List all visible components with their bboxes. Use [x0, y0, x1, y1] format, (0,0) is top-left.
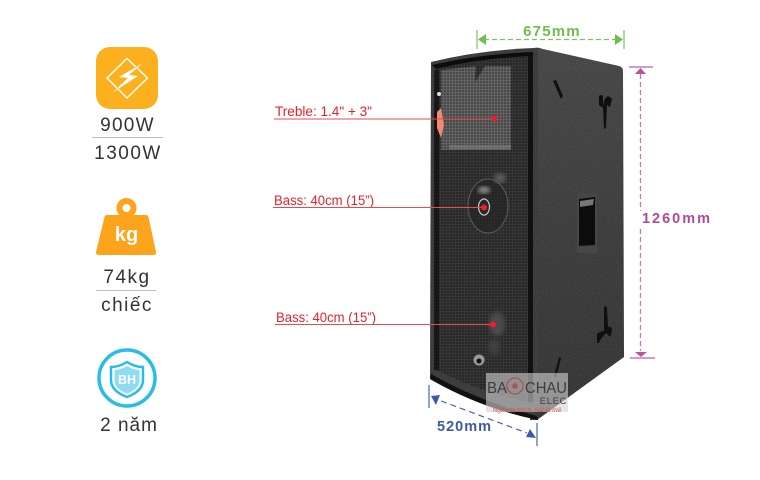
- watermark: BA: [487, 380, 507, 397]
- side handle top left: [553, 80, 563, 99]
- callout: bass bottom: Bass: 40cm (15”): [276, 310, 376, 325]
- lower woofer: [488, 312, 505, 355]
- white dot: [437, 92, 441, 96]
- weight text: [96, 267, 156, 316]
- weight text: chiếc: [101, 295, 153, 316]
- weight icon: [96, 201, 156, 255]
- power text: 900W: [100, 115, 155, 136]
- front frame band: [432, 52, 533, 69]
- callout: bass bottom: [275, 310, 496, 328]
- dimension: height 1260mm: 1260mm: [642, 211, 710, 227]
- dimension: width 675mm: 675mm: [523, 23, 581, 40]
- watermark: Nghe là thích, hát là mê: [493, 407, 562, 414]
- warranty shield icon: [99, 350, 155, 406]
- power icon: [96, 47, 158, 109]
- dimension: height 1260mm: [629, 67, 710, 358]
- dimension: depth 520mm: 520mm: [437, 419, 491, 435]
- side slot bottom: [554, 357, 561, 378]
- dimension: depth 520mm: [429, 385, 537, 446]
- speaker side panel: [530, 48, 624, 420]
- bolt: [474, 354, 484, 366]
- speaker grille: [434, 53, 528, 402]
- horn: [441, 66, 511, 150]
- watermark: CHAU: [525, 380, 567, 397]
- power text: 1300W: [94, 143, 162, 164]
- watermark: [486, 373, 568, 414]
- left inner strip: [434, 70, 439, 370]
- power text: [92, 115, 163, 164]
- weight icon: kg: [115, 224, 138, 246]
- callout: bass top: Bass: 40cm (15”): [274, 193, 374, 208]
- speaker: [430, 48, 624, 420]
- side rigging bottom: [597, 306, 612, 343]
- callout: treble: Treble: 1.4" + 3": [275, 104, 372, 119]
- callout: treble: [274, 104, 498, 122]
- red tag: [437, 108, 444, 138]
- right inner strip: [528, 55, 533, 402]
- callout: bass top: [273, 193, 487, 210]
- weight text: 74kg: [103, 267, 151, 288]
- watermark: ELEC: [540, 396, 567, 407]
- warranty shield icon: BH: [118, 373, 136, 387]
- dimension: width 675mm: [477, 23, 624, 49]
- side rigging top right: [599, 95, 612, 129]
- top woofer: [468, 173, 508, 233]
- bottom edge: [430, 374, 538, 420]
- speaker front cabinet: [430, 48, 538, 420]
- side handle centre: [577, 193, 597, 253]
- warranty text: 2 năm: [100, 415, 158, 436]
